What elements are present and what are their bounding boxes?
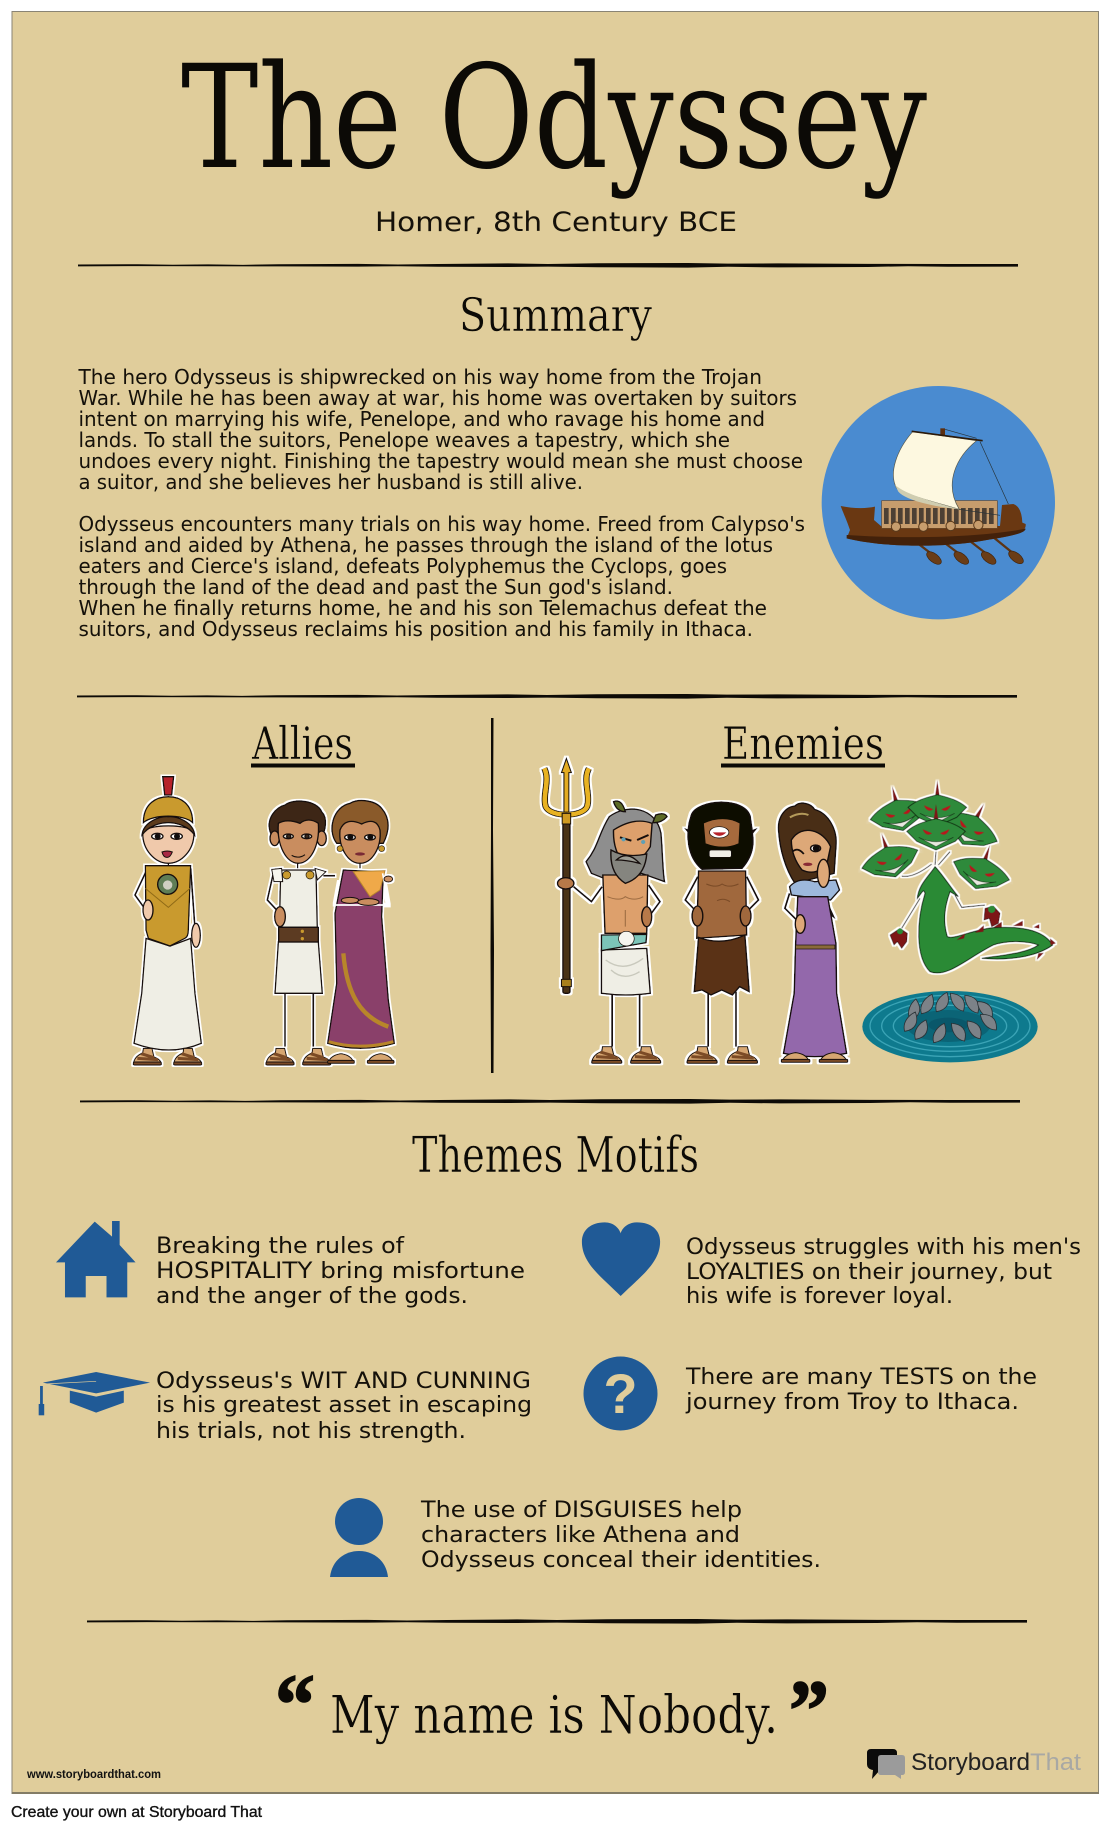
characters: Odysseus and Penelope (266, 801, 394, 1065)
text: his wife is forever loyal. (686, 1284, 953, 1309)
subtitle: author and date: Homer, 8th Century BCE (375, 207, 737, 238)
title: The Odyssey (181, 34, 927, 201)
text: Odysseus's WIT AND CUNNING (156, 1369, 531, 1394)
character: Poseidon with trident (544, 758, 667, 1063)
text: Odysseus conceal their identities. (421, 1548, 821, 1573)
theme: tests (584, 1356, 1037, 1430)
logo: Storyboard That: Storyboard (911, 1749, 1030, 1776)
monster: Charybdis whirlpool (862, 991, 1038, 1062)
text block: summary: The hero Odysseus is shipwrecked on his way home from the Trojan (77, 365, 762, 389)
theme: loyalties (582, 1222, 1081, 1309)
website url: www.storyboardthat.com (26, 1769, 161, 1781)
icon: graduation cap (39, 1372, 150, 1415)
logo: Storyboard That: That (1030, 1749, 1081, 1776)
text (685, 1365, 1037, 1415)
text block: summary: eaters and Cierce's island, defeats Polyphemus the Cyclops, goes (78, 554, 727, 578)
text block: summary (77, 365, 805, 641)
footer link: Create your own at Storyboard That (11, 1804, 263, 1821)
quote: “ (275, 1656, 315, 1752)
text block: summary: intent on marrying his wife, Penelope, and who ravage his home and (78, 407, 765, 431)
icon: heart (582, 1222, 660, 1296)
vertical divider between allies and enemies (490, 718, 494, 1073)
quote: ” (789, 1662, 829, 1758)
theme: wit and cunning (39, 1369, 532, 1444)
icon: question mark: ? (603, 1362, 638, 1425)
text: is his greatest asset in escaping (156, 1393, 532, 1418)
character: Calypso (778, 803, 848, 1062)
text: HOSPITALITY bring misfortune (156, 1259, 525, 1284)
text block: summary: island and aided by Athena, he passes through the island of the lotus (78, 533, 773, 557)
character: Polyphemus the cyclops (685, 802, 758, 1063)
text block: summary: lands. To stall the suitors, Penelope weaves a tapestry, which she (78, 428, 730, 452)
text block: summary: Odysseus encounters many trials on his way home. Freed from Calypso's (78, 512, 805, 536)
character: Athena (133, 777, 202, 1065)
text block: summary: suitors, and Odysseus reclaims his position and his family in Ithaca. (78, 617, 753, 641)
man (285, 993, 313, 1047)
hull (841, 504, 1026, 546)
text: Breaking the rules of (156, 1234, 405, 1259)
woman (332, 801, 388, 843)
text: journey from Troy to Ithaca. (685, 1390, 1019, 1415)
panel: allies characters (133, 777, 394, 1065)
text (420, 1498, 821, 1573)
text (686, 1235, 1081, 1309)
text: and the anger of the gods. (156, 1284, 468, 1309)
text block: summary: War. While he has been away at war, his home was overtaken by suitors (78, 386, 797, 410)
icon: question mark (584, 1356, 658, 1430)
oars (896, 525, 1025, 567)
panel: enemies characters (544, 758, 1056, 1063)
text block: summary: through the land of the dead and past the Sun god's island. (78, 575, 673, 599)
icon: house (56, 1221, 136, 1297)
sail (893, 432, 977, 509)
heading: enemies: Enemies (722, 717, 884, 770)
quote: My name is Nobody. (330, 1686, 778, 1746)
logo: Storyboard That (867, 1749, 1081, 1779)
text (156, 1369, 532, 1444)
heading: themes and motifs: Themes Motifs (412, 1126, 699, 1184)
text: his trials, not his strength. (156, 1419, 466, 1444)
text block: summary: undoes every night. Finishing the tapestry would mean she must choose (78, 449, 803, 473)
text (156, 1234, 525, 1309)
text: The use of DISGUISES help (420, 1498, 742, 1523)
text: There are many TESTS on the (685, 1365, 1037, 1390)
monster: Scylla (850, 778, 1056, 973)
heading: summary: Summary (459, 288, 652, 342)
text block: summary: When he finally returns home, he and his son Telemachus defeat the (78, 596, 767, 620)
text: characters like Athena and (421, 1523, 740, 1548)
mast and rigging (912, 428, 1008, 515)
icon: ship in blue circle (822, 386, 1055, 619)
quote (275, 1656, 829, 1758)
heading: allies: Allies (251, 717, 353, 770)
theme: hospitality (56, 1221, 525, 1309)
text block: summary: a suitor, and she believes her husband is still alive. (78, 470, 583, 494)
deck house (882, 501, 997, 528)
text: LOYALTIES on their journey, but (686, 1260, 1052, 1285)
icon: speech bubbles (867, 1749, 905, 1779)
icon: person (330, 1498, 388, 1577)
theme: disguises (330, 1498, 821, 1577)
text: Odysseus struggles with his men's (686, 1235, 1081, 1260)
